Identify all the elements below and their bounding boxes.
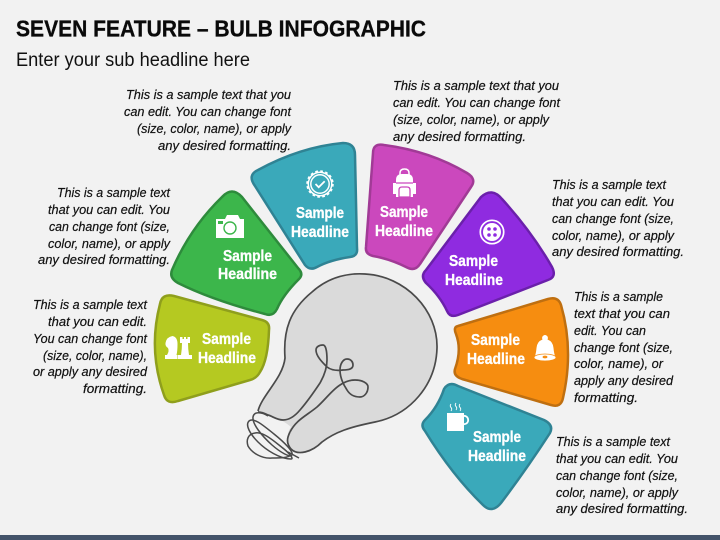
text block: teal feature: any desired formatting. bbox=[158, 138, 291, 153]
heading: lime: Headline bbox=[198, 350, 256, 367]
text block: green feature bbox=[38, 185, 171, 267]
panel: magenta segment bbox=[366, 145, 473, 269]
text block: lime feature: (size, color, name), bbox=[43, 348, 147, 363]
text block: teal lower feature: that you can edit. You bbox=[556, 451, 678, 466]
heading: orange: Sample bbox=[471, 332, 520, 349]
icon: bell bbox=[534, 335, 556, 361]
icon: check badge bbox=[308, 172, 332, 196]
heading: teal lower bbox=[468, 429, 526, 465]
icon: coffee mug bbox=[447, 403, 468, 431]
heading: teal: Sample bbox=[296, 205, 344, 222]
heading: teal: Headline bbox=[291, 224, 349, 241]
icon: light bulb bbox=[247, 274, 437, 459]
heading: green bbox=[218, 248, 277, 283]
text block: green feature: any desired formatting. bbox=[38, 252, 170, 267]
heading: orange bbox=[467, 332, 525, 368]
text block: lime feature: that you can edit. bbox=[48, 314, 147, 329]
text block: green feature: can change font (size, bbox=[49, 219, 170, 234]
text block: lime feature: formatting. bbox=[83, 381, 147, 396]
text block: lime feature: This is a sample text bbox=[33, 297, 148, 312]
text block: teal lower feature: This is a sample text bbox=[556, 434, 671, 449]
panel: teal lower segment bbox=[422, 384, 551, 509]
icon: button bbox=[480, 220, 504, 244]
icon: camera bbox=[216, 215, 244, 238]
text block: magenta feature: can edit. You can change font bbox=[393, 95, 561, 110]
subtitle: Enter your sub headline here bbox=[16, 50, 250, 71]
title: SEVEN FEATURE – BULB INFOGRAPHIC bbox=[16, 16, 426, 42]
heading: purple: Sample bbox=[449, 253, 498, 270]
text block: orange feature: formatting. bbox=[574, 390, 638, 405]
text block: teal feature: This is a sample text that you bbox=[126, 87, 291, 102]
text block: purple feature: that you can edit. You bbox=[552, 194, 674, 209]
text block: purple feature: color, name), or apply bbox=[552, 228, 675, 243]
text block: magenta feature bbox=[393, 78, 561, 144]
bulb filament bbox=[258, 345, 368, 432]
text block: purple feature: can change font (size, bbox=[552, 211, 674, 226]
text block: teal lower feature bbox=[556, 434, 688, 516]
panel: teal segment bbox=[252, 143, 357, 269]
panel: green segment bbox=[171, 192, 301, 315]
text block: green feature: that you can edit. You bbox=[48, 202, 170, 217]
text block: purple feature bbox=[552, 177, 684, 259]
text block: green feature: This is a sample text bbox=[57, 185, 171, 200]
text block: teal lower feature: any desired formatting. bbox=[556, 501, 688, 516]
heading: teal bbox=[291, 205, 349, 241]
heading: green: Headline bbox=[218, 266, 277, 283]
text block: lime feature bbox=[33, 297, 148, 396]
text block: teal feature bbox=[124, 87, 292, 153]
heading: purple: Headline bbox=[445, 272, 503, 289]
panel: lime segment bbox=[155, 295, 269, 402]
text block: magenta feature: (size, color, name), or apply bbox=[393, 112, 550, 127]
heading: purple bbox=[445, 253, 503, 289]
text block: orange feature bbox=[574, 289, 674, 405]
text block: magenta feature: any desired formatting. bbox=[393, 129, 526, 144]
heading: lime: Sample bbox=[202, 331, 251, 348]
text block: teal feature: (size, color, name), or apply bbox=[137, 121, 292, 136]
heading: teal lower: Sample bbox=[473, 429, 521, 446]
icon: chess pieces bbox=[165, 336, 192, 359]
text block: teal feature: can edit. You can change font bbox=[124, 104, 292, 119]
text block: purple feature: This is a sample text bbox=[552, 177, 667, 192]
text block: teal lower feature: can change font (size, bbox=[556, 468, 678, 483]
heading: magenta: Headline bbox=[375, 223, 433, 240]
text block: purple feature: any desired formatting. bbox=[552, 244, 684, 259]
text block: teal lower feature: color, name), or apply bbox=[556, 485, 679, 500]
icon: backpack bbox=[393, 169, 416, 197]
text block: lime feature: or apply any desired bbox=[33, 364, 148, 379]
panel: orange segment bbox=[455, 298, 568, 406]
text block: orange feature: color, name), or bbox=[574, 356, 664, 371]
text block: orange feature: edit. You can bbox=[574, 323, 646, 338]
heading: orange: Headline bbox=[467, 351, 525, 368]
text block: orange feature: text that you can bbox=[574, 306, 670, 321]
heading: magenta: Sample bbox=[380, 204, 428, 221]
bulb base scribble bbox=[247, 413, 299, 459]
text block: orange feature: This is a sample bbox=[574, 289, 663, 304]
panel: purple segment bbox=[423, 192, 554, 316]
heading: green: Sample bbox=[223, 248, 272, 265]
text block: magenta feature: This is a sample text that you bbox=[393, 78, 559, 93]
text block: green feature: color, name), or apply bbox=[48, 236, 171, 251]
heading: teal lower: Headline bbox=[468, 448, 526, 465]
text block: orange feature: apply any desired bbox=[574, 373, 674, 388]
text block: orange feature: change font (size, bbox=[574, 340, 673, 355]
text block: lime feature: You can change font bbox=[33, 331, 148, 346]
heading: lime bbox=[198, 331, 256, 367]
heading: magenta bbox=[375, 204, 433, 240]
